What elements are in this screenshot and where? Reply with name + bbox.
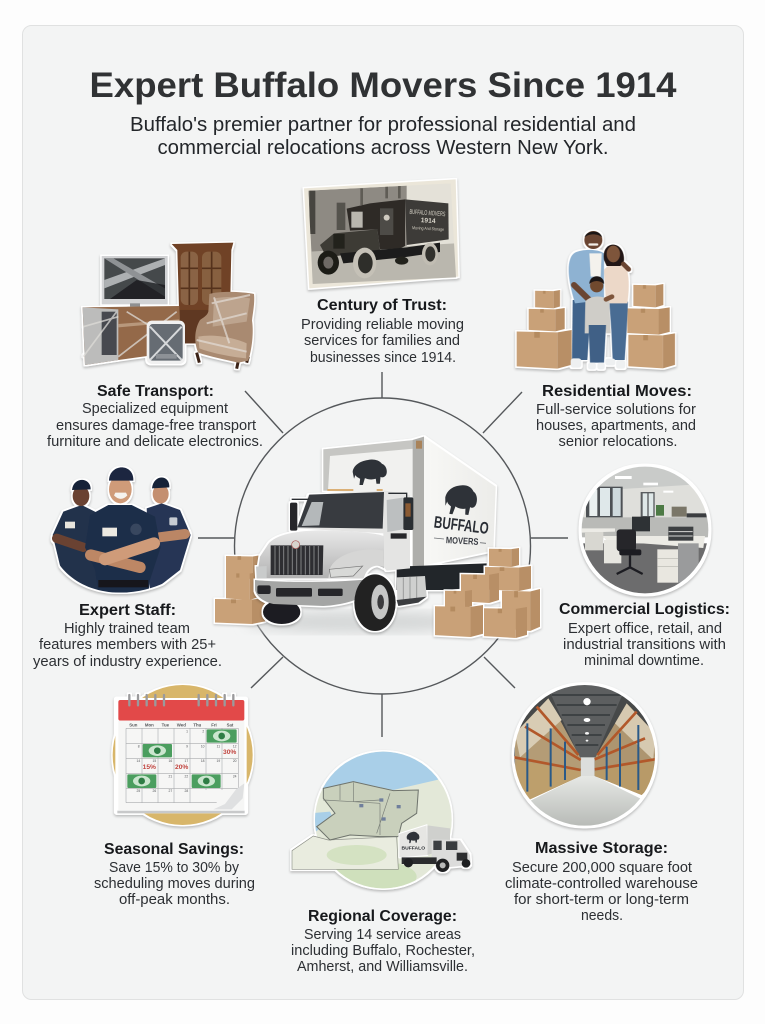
description — [33, 621, 222, 670]
icon: vintage truck photo: BUFFALO MOVERS — [409, 209, 446, 218]
icon: savings calendar: 30% — [223, 749, 236, 756]
icon: savings calendar: 21 — [168, 774, 172, 778]
panel: Commercial Logistics — [559, 465, 730, 669]
icon: savings calendar: 25 — [136, 789, 140, 793]
description: Secure 200,000 square foot — [512, 860, 692, 876]
icon: savings calendar: 11 — [217, 745, 220, 749]
icon: savings calendar: Thu — [193, 722, 202, 727]
icon: savings calendar: Sat — [227, 722, 234, 727]
description: climate-controlled warehouse — [505, 876, 698, 892]
icon: wrapped furniture — [83, 243, 254, 369]
panel: Expert Staff — [33, 467, 222, 670]
description: industrial transitions with — [563, 637, 726, 653]
description: Save 15% to 30% by — [109, 860, 240, 876]
icon: savings calendar: 24 — [233, 774, 237, 778]
icon: vintage truck photo — [303, 179, 460, 288]
subtitle: commercial relocations across Western New York. — [158, 137, 608, 159]
description — [563, 621, 726, 669]
icon: coverage map — [292, 750, 471, 893]
description: furniture and delicate electronics. — [47, 434, 263, 450]
description — [47, 401, 263, 450]
heading: Regional Coverage: — [308, 908, 457, 925]
sideboard — [83, 306, 179, 365]
description: Specialized equipment — [82, 401, 228, 417]
description: Highly trained team — [64, 621, 190, 637]
heading: Safe Transport: — [97, 383, 214, 400]
boxes right of truck — [435, 548, 540, 638]
icon: savings calendar: 15% — [143, 764, 156, 771]
icon: savings calendar: 18 — [201, 759, 205, 763]
subtitle: Buffalo's premier partner for professional residential and — [130, 114, 636, 136]
icon: savings calendar: 16 — [168, 759, 172, 763]
panel: Century of Trust — [301, 179, 464, 366]
box body — [405, 199, 449, 245]
description: services for families and — [304, 333, 460, 349]
child — [585, 297, 611, 333]
icon: savings calendar: 17 — [184, 759, 188, 763]
description — [301, 317, 464, 366]
icon: savings calendar: 28 — [184, 789, 188, 793]
heading: Residential Moves: — [542, 383, 692, 400]
heading: Expert Staff: — [79, 602, 176, 619]
grille — [271, 545, 323, 575]
boxes left of truck — [215, 555, 265, 624]
icon: vintage truck photo: 1914 — [420, 217, 436, 225]
description: minimal downtime. — [584, 653, 704, 669]
description: including Buffalo, Rochester, — [291, 943, 475, 959]
description: Amherst, and Williamsville. — [297, 959, 468, 975]
description — [505, 860, 698, 924]
icon: warehouse aisle — [510, 683, 658, 830]
description: ensures damage-free transport — [56, 418, 256, 434]
description: Serving 14 service areas — [304, 927, 461, 943]
description: businesses since 1914. — [310, 350, 456, 366]
icon: savings calendar: 26 — [152, 789, 156, 793]
description: needs. — [581, 908, 623, 924]
chair — [617, 529, 636, 551]
cargo box: BUFFALO — [433, 512, 490, 538]
description — [94, 860, 255, 908]
heading: Commercial Logistics: — [559, 601, 730, 618]
icon: vintage truck photo: Moving And Storage — [412, 225, 445, 232]
page curl — [213, 783, 244, 809]
icon: savings calendar: 15 — [152, 759, 156, 763]
panel: Residential Moves — [517, 231, 696, 450]
central truck illustration — [215, 437, 540, 638]
shoes — [571, 358, 581, 368]
icon: savings calendar: 10 — [201, 745, 205, 749]
description — [536, 402, 696, 450]
description: years of industry experience. — [33, 654, 222, 670]
center man — [85, 505, 161, 593]
central hub circle with spokes — [198, 372, 568, 737]
left man — [53, 505, 103, 593]
mini truck — [399, 825, 471, 872]
small wrapped item — [147, 321, 185, 364]
cabinet — [172, 243, 233, 343]
mini truck: BUFFALO — [402, 845, 425, 851]
subtitle — [130, 114, 636, 159]
tv — [102, 256, 168, 304]
description: for short-term or long-term — [514, 892, 689, 908]
description: features members with 25+ — [39, 637, 216, 653]
heading: Massive Storage: — [535, 840, 668, 857]
icon: savings calendar: Tue — [162, 722, 170, 727]
panel: Massive Storage — [505, 683, 698, 924]
description: Providing reliable moving — [301, 317, 464, 333]
hood and fender — [257, 530, 384, 578]
cargo box: MOVERS — [446, 535, 479, 547]
description: scheduling moves during — [94, 876, 255, 892]
right man — [147, 503, 191, 593]
description: houses, apartments, and — [536, 418, 696, 434]
description: Full-service solutions for — [536, 402, 696, 418]
icon: savings calendar: 12 — [233, 745, 237, 749]
icon: savings calendar: 9 — [186, 745, 188, 749]
icon: savings calendar: Mon — [145, 722, 154, 727]
chassis — [397, 563, 487, 590]
panel: Regional Coverage — [291, 750, 475, 975]
title: Expert Buffalo Movers Since 1914 — [90, 66, 677, 105]
icon: savings calendar: 2 — [202, 730, 204, 734]
icon: savings calendar: Wed — [177, 722, 186, 727]
panel: Seasonal Savings — [94, 685, 255, 908]
money bills — [127, 729, 237, 788]
cab — [297, 491, 410, 571]
heading: Seasonal Savings: — [104, 841, 244, 858]
man — [572, 300, 590, 360]
icon: savings calendar: 19 — [216, 759, 220, 763]
icon: savings calendar: Sun — [129, 722, 138, 727]
description: Expert office, retail, and — [568, 621, 722, 637]
icon: savings calendar: 20 — [233, 759, 237, 763]
moving truck — [255, 437, 496, 631]
bumper — [255, 579, 367, 606]
heading: Century of Trust: — [317, 297, 447, 314]
icon: savings calendar: 8 — [138, 745, 140, 749]
icon: savings calendar: 1 — [186, 730, 188, 734]
icon: office photo — [580, 465, 713, 597]
icon: savings calendar — [113, 685, 253, 825]
icon: savings calendar: 22 — [184, 774, 188, 778]
ground shadow — [245, 611, 475, 633]
icon: savings calendar: 27 — [168, 789, 172, 793]
icon: savings calendar: 14 — [136, 759, 140, 763]
description: off-peak months. — [119, 892, 230, 908]
description: senior relocations. — [558, 434, 678, 450]
icon: family with boxes — [517, 231, 675, 369]
right front wheel — [354, 574, 396, 631]
description — [291, 927, 475, 975]
left front wheel — [263, 600, 300, 624]
panel: Safe Transport — [47, 243, 263, 450]
cargo box — [323, 437, 496, 567]
icon: savings calendar: 20% — [175, 764, 188, 771]
icon: savings calendar: Fri — [211, 722, 217, 727]
woman — [609, 302, 628, 360]
icon: moving crew — [53, 467, 191, 593]
armchair — [197, 353, 248, 369]
